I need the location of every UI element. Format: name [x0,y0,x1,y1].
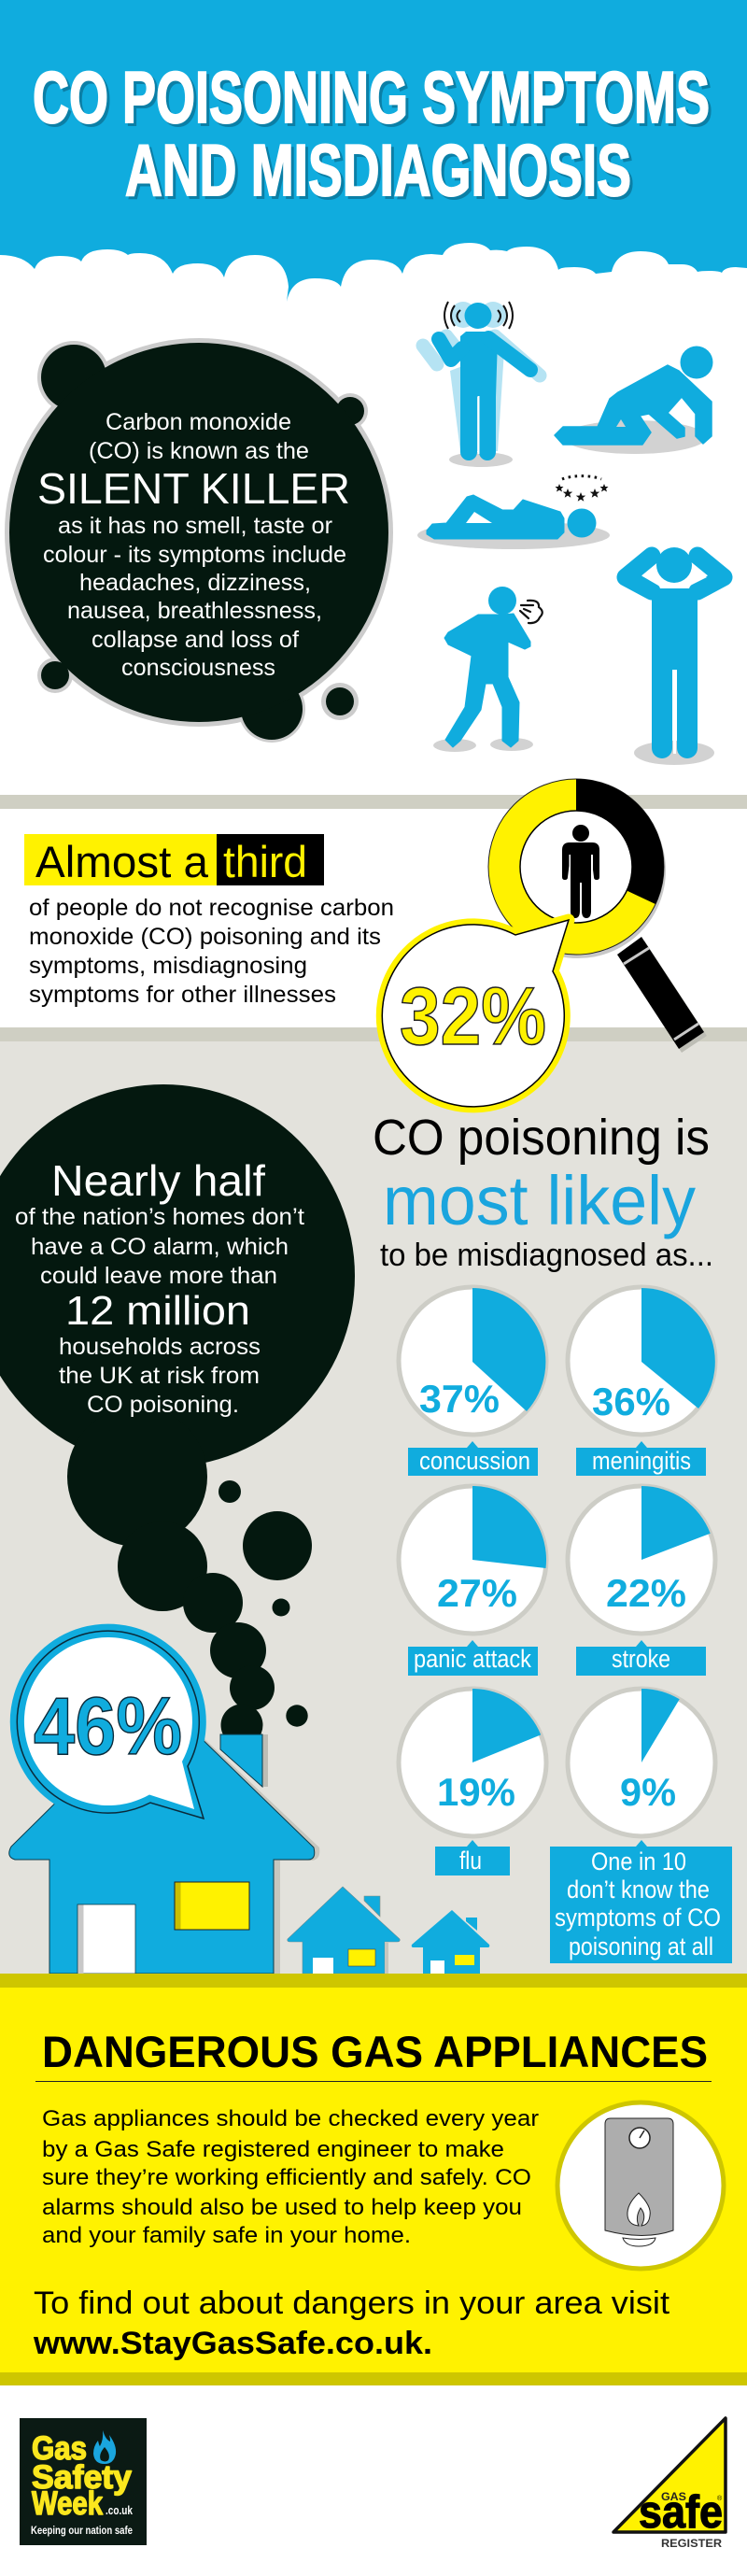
text: people do not recognise: symptoms, misdiagnosing [29,953,307,979]
pie chart: flu 19%: 19% [437,1770,515,1814]
panel: blue header with cloud edge [0,0,747,302]
text: call to action: www.StayGasSafe.co.uk. [33,2326,432,2361]
text: silent killer description: (CO) is known as the [89,438,309,464]
icon: breathless person [433,587,543,752]
logo: gas safe register: GAS [661,2490,686,2503]
pie chart: one in 10 9%: don’t know the [567,1875,710,1904]
text: nearly half: could leave more than [40,1263,277,1289]
illustration: large house [9,1699,319,1974]
pie chart: one in 10 9% [550,1689,732,1963]
logo: gas safety week [20,2418,147,2545]
icon: boiler [557,2102,724,2269]
text: call to action: To find out about dangers in your area visit [34,2286,670,2321]
panel: dangerous gas appliances [0,1974,747,2385]
pie chart: panic attack 27% [399,1486,546,1676]
pie chart: concussion 37%: 37% [419,1377,500,1421]
text: gas appliances should be checked: alarms should also be used to help keep you [42,2195,522,2220]
text: silent killer description [37,409,350,681]
icon: breath puff [520,601,543,623]
icon: person in lens [562,825,599,918]
text: gas appliances should be checked: Gas appliances should be checked every year [42,2106,539,2131]
text: nearly half: households across [59,1334,261,1360]
logo: gas safety week: Week [32,2485,103,2522]
text: gas appliances should be checked: and your family safe in your home. [42,2223,411,2248]
pie chart: one in 10 9%: symptoms of CO [555,1904,721,1932]
logo: gas safety week: Safety [32,2459,133,2496]
text: people do not recognise: symptoms for other illnesses [29,982,336,1008]
panel: almost a third headline: third [223,837,307,886]
text: nearly half [15,1156,304,1418]
text: silent killer description: nausea, breathlessness, [67,598,322,624]
heading: most likely to be misdiagnosed: to be misdiagnosed as... [380,1238,713,1273]
pie chart: panic attack 27%: panic attack [414,1645,531,1673]
callout: 46%: 46% [34,1681,182,1772]
text: call to action [33,2286,670,2361]
pie chart: panic attack 27%: 27% [437,1571,517,1615]
text: gas appliances should be checked: by a Gas Safe registered engineer to make [42,2137,504,2162]
text: nearly half: Nearly half [51,1156,265,1205]
text: gas appliances should be checked: sure they’re working efficiently and safely. CO [42,2165,531,2190]
pie chart: concussion 37% [399,1287,546,1476]
pie chart: meningitis 36% [568,1287,715,1476]
icon: unconscious person lying down [417,476,610,549]
logo: gas safe register: REGISTER [661,2537,722,2550]
pie chart: stroke 22%: 22% [606,1571,686,1615]
text: silent killer description: Carbon monoxide [106,409,291,435]
pie chart: one in 10 9%: One in 10 [591,1847,686,1875]
pie chart: stroke 22%: stroke [612,1645,670,1673]
icon: person holding head [626,547,724,765]
pie chart: stroke 22% [568,1486,715,1676]
text: silent killer description: colour - its symptoms include [43,542,346,568]
icon: dizzy stars [555,476,609,502]
text: people do not recognise [29,895,394,1008]
logo: gas safe register [613,2418,726,2550]
panel: silent killer black blob [5,338,393,743]
panel: almost a third headline: Almost a [35,837,209,886]
text: nearly half: the UK at risk from [59,1363,260,1389]
icon: magnifying glass [488,779,707,1053]
pie chart: concussion 37%: concussion [419,1447,530,1475]
pie chart: one in 10 9%: 9% [620,1770,676,1814]
illustration: small house [412,1910,489,1974]
text: people do not recognise: monoxide (CO) poisoning and its [29,924,381,950]
icon: crawling person [555,346,713,454]
callout: 32%: 32% [400,971,546,1062]
text: gas appliances should be checked [42,2106,539,2248]
logo: gas safe register: ® [717,2495,723,2502]
text: people do not recognise: of people do not recognise carbon [29,895,394,921]
text: nearly half: CO poisoning. [87,1392,239,1418]
icon: dizzy person [423,302,540,467]
pie chart: flu 19%: flu [459,1847,482,1875]
text: nearly half: have a CO alarm, which [31,1234,289,1260]
illustration: medium house [288,1887,400,1974]
logo: gas safety week: Keeping our nation safe [31,2526,133,2537]
panel: grey background [0,1027,747,1974]
title [33,56,710,211]
heading: dangerous gas appliances: DANGEROUS GAS APPLIANCES [42,2027,708,2076]
text: silent killer description: consciousness [121,655,275,681]
logo: gas safety week: .co.uk [106,2503,134,2517]
illustration: smoke cloud [0,1084,355,1747]
text: silent killer description: as it has no smell, taste or [58,513,332,539]
icon: blue flame [93,2430,116,2464]
pie chart: flu 19% [399,1689,546,1875]
pie chart: one in 10 9%: poisoning at all [569,1932,713,1960]
text: silent killer description: SILENT KILLER [37,464,350,513]
logo: gas safety week: Gas [32,2430,87,2467]
text: nearly half: of the nation’s homes don’t [15,1204,304,1230]
heading: most likely to be misdiagnosed: CO poisoning is [373,1110,710,1166]
callout: 32% [382,920,569,1107]
heading: most likely to be misdiagnosed [373,1110,713,1273]
pie chart: meningitis 36%: meningitis [592,1447,691,1475]
heading: most likely to be misdiagnosed: most likely [383,1162,696,1239]
text: silent killer description: headaches, dizziness, [79,570,311,596]
pie chart: meningitis 36%: 36% [592,1380,670,1423]
panel: almost a third headline [24,834,324,886]
text: silent killer description: collapse and loss of [92,627,299,653]
logo: gas safe register: safe [639,2487,723,2538]
text: nearly half: 12 million [65,1288,250,1334]
callout: 46% [17,1631,204,1819]
